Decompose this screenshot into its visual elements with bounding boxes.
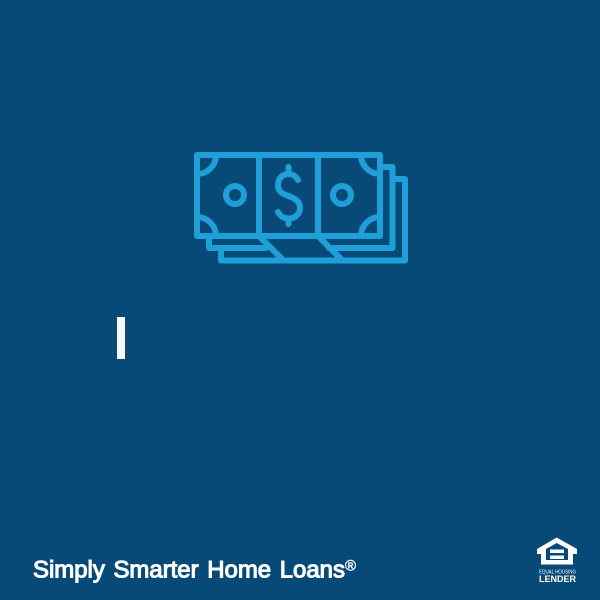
front bill outline [197,155,380,236]
bill right circle [333,186,351,204]
bill corner arcs [197,155,380,236]
equal housing caption: EQUAL HOUSING [539,570,576,576]
bill left circle [226,186,244,204]
icon: equal housing lender logo [537,538,577,585]
dollar sign [278,167,300,224]
bill fold diagonals [259,236,342,260]
bill panel dividers [259,155,318,236]
icon: stack of money bills [197,155,405,260]
equals sign [550,550,564,559]
lender caption: LENDER [539,574,576,585]
tagline: ® [345,558,356,574]
house shape [537,538,577,564]
middle bill edge [209,167,392,248]
tagline: Simply Smarter Home Loans [33,556,346,584]
text cursor bar [117,317,125,359]
back bill edge [221,179,405,260]
